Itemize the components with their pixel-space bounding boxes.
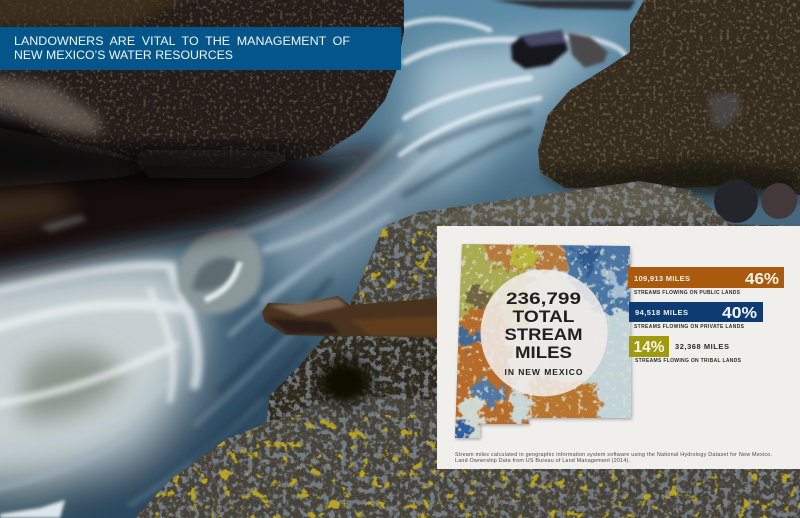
title banner: LANDOWNERS ARE VITAL TO THE MANAGEMENT OF [14,34,350,48]
dark water streaks [195,112,530,460]
flowing water [0,19,625,518]
pale foam streaks [0,265,198,490]
top-left boulder [0,0,404,190]
top-right boulder [538,0,800,223]
title banner [0,27,401,70]
circle with total stream miles: IN NEW MEXICO [504,367,583,377]
panel: stream mile statistics [437,226,800,469]
bar: public lands 46%: STREAMS FLOWING ON PUBLIC LANDS [634,290,741,296]
swirl of water [177,228,263,314]
dark pool at left of river [0,100,400,285]
bar: private lands 40%: 94,518 MILES [635,308,688,317]
circle with total stream miles: 236,799 [506,289,581,308]
upper rapids streaks [400,19,625,155]
bar: public lands 46%: 109,913 MILES [634,274,690,283]
circle with total stream miles [480,270,608,396]
circle with total stream miles: MILES [515,343,572,362]
circle with total stream miles: TOTAL [512,307,574,326]
bar: public lands 46%: 46% [745,271,779,288]
mid-river stones [511,30,608,69]
bar: private lands 40% [629,302,763,330]
lower lichen-covered rock [130,180,800,518]
title banner: NEW MEXICO’S WATER RESOURCES [14,48,233,62]
bar: private lands 40%: 40% [722,305,757,322]
footnote [455,452,772,464]
bar: tribal lands 14%: 32,368 MILES [675,342,729,351]
footnote: Stream miles calculated in geographic information system software using the National Hydrology Dataset for New Mexico. [455,452,772,458]
circle with total stream miles: STREAM [504,325,582,344]
mid-river streaks [130,135,435,505]
stone bank at top of river [492,0,636,10]
bar: tribal lands 14%: STREAMS FLOWING ON TRIBAL LANDS [635,358,742,364]
bar: tribal lands 14% [629,336,742,364]
footnote: Land Ownership Data from US Bureau of Land Management (2014). [455,458,630,464]
map of New Mexico [454,244,634,442]
driftwood log [262,296,438,338]
bar: public lands 46% [628,267,784,296]
bar: private lands 40%: STREAMS FLOWING ON PRIVATE LANDS [634,324,745,330]
bar: tribal lands 14%: 14% [634,339,665,356]
